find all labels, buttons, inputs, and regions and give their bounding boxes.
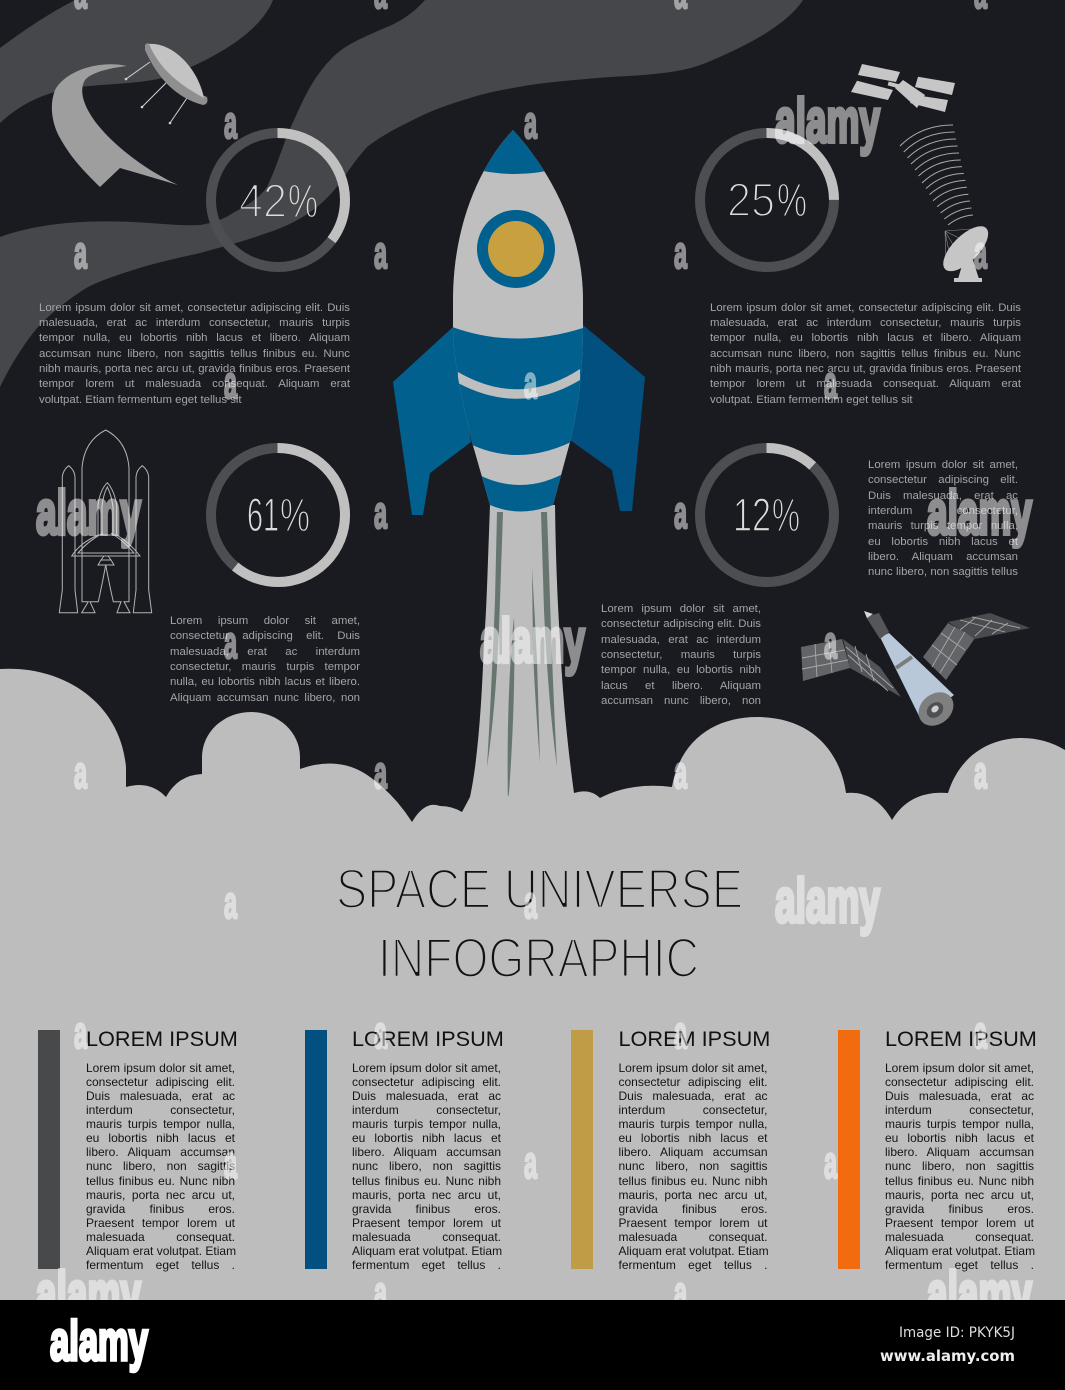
watermark: alamy marks: a — [674, 747, 688, 798]
text block: 12% description lower: tempor nulla, eu lobortis nibh — [601, 664, 761, 676]
title — [336, 857, 743, 989]
percent labels: 25 — [727, 173, 775, 226]
text block: 61% description: nulla, eu lobortis nibh lacus et libero. — [170, 676, 360, 688]
watermark: alamy marks: a — [974, 1007, 988, 1058]
text block: 25% description: tempor nulla, eu lobortis nibh lacus et libero. Aliquam — [710, 332, 1021, 344]
column 4 body: gravida finibus eros. — [885, 1202, 1034, 1216]
column 3 body: tellus finibus eu. Nunc nibh — [618, 1174, 768, 1188]
telescope tube — [880, 633, 954, 720]
column 4 body: Duis malesuada, erat ac — [885, 1089, 1034, 1103]
column 2 body: mauris, porta nec arcu ut, — [352, 1188, 501, 1202]
column 4 body: libero. Aliquam accumsan — [885, 1145, 1034, 1159]
column 4 body: Aliquam erat volutpat. Etiam — [885, 1244, 1035, 1258]
icon: space shuttle outline — [59, 430, 152, 613]
column 2 body: Lorem ipsum dolor sit amet, — [352, 1061, 501, 1075]
text block: 12% description lower: consectetur adipiscing elit. Duis — [601, 618, 761, 630]
column 3 body — [618, 1061, 769, 1272]
column 4 body: Lorem ipsum dolor sit amet, — [885, 1061, 1034, 1075]
text block: 61% description: Lorem ipsum dolor sit amet, — [170, 615, 360, 627]
colour bar: blue — [305, 1030, 327, 1269]
column 3 body: mauris, porta nec arcu ut, — [618, 1188, 768, 1202]
column 2 body: nunc libero, non sagittis — [352, 1159, 501, 1173]
footer image id: Image ID: PKYK5J — [899, 1325, 1015, 1341]
text block: 12% description lower — [601, 603, 761, 707]
percent labels: 61 — [247, 488, 279, 541]
column 4 body: eu lobortis nibh lacus et — [885, 1131, 1034, 1145]
icon: signal waves — [900, 125, 973, 225]
column 1 body: malesuada consequat. — [86, 1230, 235, 1244]
percent labels: 12 — [733, 488, 771, 541]
chart: 12% donut — [700, 448, 834, 582]
column 4 — [885, 1026, 1037, 1272]
text block: 25% description: nibh mauris, porta nec arcu ut, gravida finibus eros. Praesent — [710, 363, 1021, 375]
text block: 12% description lower: Lorem ipsum dolor sit amet, — [601, 603, 761, 615]
text block: 42% description: malesuada, erat ac interdum consectetur, mauris turpis — [39, 317, 350, 329]
column 1 body: eu lobortis nibh lacus et — [86, 1131, 235, 1145]
watermark: alamy marks: a — [524, 357, 538, 408]
column 3 body: fermentum eget tellus . — [618, 1258, 768, 1272]
percent labels: 42 — [239, 174, 287, 227]
watermark: alamy marks: a — [824, 617, 838, 668]
text block: 12% description right: nunc libero, non sagittis tellus — [868, 566, 1018, 578]
percent labels: % — [772, 488, 800, 541]
column 1 body: interdum consectetur, — [86, 1103, 235, 1117]
column 4 body: interdum consectetur, — [885, 1103, 1034, 1117]
column 2 body: interdum consectetur, — [352, 1103, 501, 1117]
icon: satellite dish — [936, 219, 995, 282]
watermark: alamy marks: a — [224, 877, 238, 928]
icon: communication satellite — [851, 64, 955, 112]
text block: 25% description: Lorem ipsum dolor sit amet, consectetur adipiscing elit. Duis — [710, 302, 1021, 314]
column 3 body: Lorem ipsum dolor sit amet, — [618, 1061, 768, 1075]
column 1 body: Aliquam erat volutpat. Etiam — [86, 1244, 236, 1258]
column 4 body: fermentum eget tellus . — [885, 1258, 1034, 1272]
left solar wing — [801, 639, 901, 697]
column 1 body: Praesent tempor lorem ut — [86, 1216, 235, 1230]
percent labels: % — [280, 488, 310, 541]
column 1 body: consectetur adipiscing elit. — [86, 1075, 235, 1089]
title: INFOGRAPHIC — [378, 926, 699, 989]
column 2 body: tellus finibus eu. Nunc nibh — [352, 1174, 501, 1188]
column 1 — [86, 1026, 238, 1272]
column 1 heading: LOREM IPSUM — [86, 1026, 238, 1051]
text block: 42% description: Lorem ipsum dolor sit amet, consectetur adipiscing elit. Duis — [39, 302, 350, 314]
text block: 12% description right: Duis malesuada, erat ac — [868, 490, 1018, 502]
column 1 body: mauris, porta nec arcu ut, — [86, 1188, 235, 1202]
column 1 body: fermentum eget tellus . — [86, 1258, 235, 1272]
column 1 body: Duis malesuada, erat ac — [86, 1089, 235, 1103]
watermark: alamy marks: a — [374, 1007, 388, 1058]
column 4 heading: LOREM IPSUM — [885, 1026, 1037, 1051]
column 2 body: consectetur adipiscing elit. — [352, 1075, 501, 1089]
rocket porthole — [477, 210, 555, 288]
watermark: alamy marks: alamy — [36, 479, 141, 548]
text block: 25% description: tempor lorem ut malesuada consequat. Aliquam erat — [710, 378, 1021, 390]
column 1 body — [86, 1061, 236, 1272]
column 4 body: mauris, porta nec arcu ut, — [885, 1188, 1034, 1202]
column 2 body: fermentum eget tellus . — [352, 1258, 501, 1272]
rocket left fin — [393, 327, 471, 515]
footer bar — [0, 1300, 1065, 1390]
text block: 61% description: malesuada, erat ac interdum — [170, 646, 360, 658]
watermark: alamy marks: a — [524, 1137, 538, 1188]
column 1 body: gravida finibus eros. — [86, 1202, 235, 1216]
percent labels: % — [777, 173, 807, 226]
column 3 body: Duis malesuada, erat ac — [618, 1089, 768, 1103]
text block: 61% description: Aliquam accumsan nunc libero, non — [170, 692, 360, 704]
text block: 42% description: accumsan nunc libero, non sagittis tellus finibus eu. Nunc — [39, 348, 350, 360]
watermark: alamy marks: a — [374, 487, 388, 538]
text block: 12% description right — [868, 459, 1018, 578]
column 3 body: mauris turpis tempor nulla, — [618, 1117, 768, 1131]
column 4 body: mauris turpis tempor nulla, — [885, 1117, 1034, 1131]
column 1 body: tellus finibus eu. Nunc nibh — [86, 1174, 235, 1188]
column 2 body: libero. Aliquam accumsan — [352, 1145, 501, 1159]
watermark: alamy marks: a — [374, 747, 388, 798]
chart: 61% donut — [211, 448, 345, 582]
percent labels — [239, 173, 807, 541]
column 2 heading: LOREM IPSUM — [352, 1026, 504, 1051]
column 4 body: tellus finibus eu. Nunc nibh — [885, 1174, 1034, 1188]
column 4 body: consectetur adipiscing elit. — [885, 1075, 1034, 1089]
text block: 12% description right: Lorem ipsum dolor sit amet, — [868, 459, 1018, 471]
icon: space telescope satellite — [801, 611, 1030, 733]
watermark: alamy marks: a — [224, 97, 238, 148]
watermark: alamy marks: a — [824, 1137, 838, 1188]
rocket exhaust — [466, 505, 580, 815]
text block: 25% description — [710, 302, 1021, 406]
text block: 61% description: consectetur adipiscing elit. Duis — [170, 630, 360, 642]
column 1 body: nunc libero, non sagittis — [86, 1159, 235, 1173]
column 2 body: gravida finibus eros. — [352, 1202, 501, 1216]
text block: 12% description right: interdum consectetur, — [868, 505, 1018, 517]
text block: 42% description: nibh mauris, porta nec arcu ut, gravida finibus eros. Praesent — [39, 363, 350, 375]
column 1 body: mauris turpis tempor nulla, — [86, 1117, 235, 1131]
text block: 61% description — [170, 615, 360, 704]
column 3 — [618, 1026, 770, 1272]
text block: 12% description right: mauris turpis tempor nulla, — [868, 520, 1018, 532]
column 3 heading: LOREM IPSUM — [618, 1026, 770, 1051]
text block: 42% description — [39, 302, 350, 406]
text block: 42% description: tempor lorem ut malesuada consequat. Aliquam erat — [39, 378, 350, 390]
column 2 body: mauris turpis tempor nulla, — [352, 1117, 501, 1131]
text block: 42% description: volutpat. Etiam fermentum eget tellus sit — [39, 394, 242, 406]
watermark: alamy marks: a — [674, 487, 688, 538]
watermark: alamy marks: a — [374, 227, 388, 278]
watermark: alamy marks: a — [74, 1007, 88, 1058]
text block: 12% description right: libero. Aliquam accumsan — [868, 551, 1018, 563]
watermark: alamy marks: a — [524, 97, 538, 148]
column 4 body: Praesent tempor lorem ut — [885, 1216, 1034, 1230]
column 2 body — [352, 1061, 502, 1272]
watermark: alamy marks: a — [524, 877, 538, 928]
colour bar: gold — [571, 1030, 593, 1269]
column 3 body: nunc libero, non sagittis — [618, 1159, 768, 1173]
text block: 25% description: malesuada, erat ac interdum consectetur, mauris turpis — [710, 317, 1021, 329]
column 3 body: Aliquam erat volutpat. Etiam — [618, 1244, 769, 1258]
text block: 12% description right: eu lobortis nibh lacus et — [868, 536, 1018, 548]
watermark: alamy marks: alamy — [775, 87, 880, 156]
smoke band: long diagonal — [0, 0, 803, 387]
column 1 body: Lorem ipsum dolor sit amet, — [86, 1061, 235, 1075]
watermark: alamy marks: a — [674, 1267, 688, 1318]
column 3 body: libero. Aliquam accumsan — [618, 1145, 768, 1159]
watermark: alamy marks: alamy — [775, 867, 880, 936]
icon: flying saucer probe — [125, 43, 208, 124]
footer logo: alamy — [50, 1309, 148, 1372]
right solar wing — [923, 613, 1030, 680]
column 3 body: Praesent tempor lorem ut — [618, 1216, 768, 1230]
watermark: alamy marks: a — [974, 227, 988, 278]
text block: 25% description: accumsan nunc libero, non sagittis tellus finibus eu. Nunc — [710, 348, 1021, 360]
smoke band: upper left — [0, 0, 273, 123]
chart: 42% donut — [211, 133, 345, 267]
icon: comet swoosh — [52, 64, 178, 187]
footer url: www.alamy.com — [880, 1347, 1015, 1365]
column 1 body: libero. Aliquam accumsan — [86, 1145, 235, 1159]
column 4 body — [885, 1061, 1035, 1272]
watermark: alamy marks: a — [374, 1267, 388, 1318]
text block: 12% description right: consectetur adipiscing elit. — [868, 474, 1018, 486]
watermark: alamy marks: alamy — [36, 1260, 141, 1329]
column 3 body: consectetur adipiscing elit. — [618, 1075, 768, 1089]
column 2 body: malesuada consequat. — [352, 1230, 501, 1244]
text block: 12% description lower: consectetur, mauris turpis — [601, 649, 761, 661]
title: SPACE UNIVERSE — [336, 857, 743, 920]
watermark: alamy marks: a — [74, 227, 88, 278]
watermark: alamy marks: a — [824, 357, 838, 408]
column 3 body: interdum consectetur, — [618, 1103, 768, 1117]
percent labels: % — [288, 174, 318, 227]
text block: 61% description: consectetur, mauris turpis tempor — [170, 661, 360, 673]
text block: 42% description: tempor nulla, eu lobortis nibh lacus et libero. Aliquam — [39, 332, 350, 344]
text block: 12% description lower: lacus et libero. Aliquam — [601, 680, 761, 692]
text block: 25% description: volutpat. Etiam fermentum eget tellus sit — [710, 394, 913, 406]
watermark: alamy marks: a — [974, 747, 988, 798]
column 2 body: Duis malesuada, erat ac — [352, 1089, 501, 1103]
watermark: alamy marks: a — [224, 617, 238, 668]
colour bar: grey — [38, 1030, 60, 1269]
watermark: alamy marks: a — [674, 227, 688, 278]
column 3 body: eu lobortis nibh lacus et — [618, 1131, 768, 1145]
chart: 25% donut — [700, 133, 834, 267]
column 4 body: nunc libero, non sagittis — [885, 1159, 1034, 1173]
rocket right fin — [570, 325, 645, 511]
column 2 body: Praesent tempor lorem ut — [352, 1216, 501, 1230]
text block: 12% description lower: malesuada, erat ac interdum — [601, 634, 761, 646]
rocket body — [453, 130, 583, 512]
column 3 body: malesuada consequat. — [618, 1230, 768, 1244]
column 4 body: malesuada consequat. — [885, 1230, 1034, 1244]
colour bar: orange — [838, 1030, 860, 1269]
rocket — [393, 120, 645, 520]
column 3 body: gravida finibus eros. — [618, 1202, 768, 1216]
text block: 12% description lower: accumsan nunc libero, non — [601, 695, 761, 707]
watermark: alamy marks: a — [74, 747, 88, 798]
watermark: alamy marks: a — [224, 1137, 238, 1188]
column 2 body: Aliquam erat volutpat. Etiam — [352, 1244, 502, 1258]
watermark: alamy marks: a — [674, 1007, 688, 1058]
watermark: alamy marks: a — [224, 357, 238, 408]
cloud and lower grey panel — [0, 669, 1065, 1300]
watermark: alamy marks: alamy — [480, 607, 585, 676]
column 2 — [352, 1026, 504, 1272]
column 2 body: eu lobortis nibh lacus et — [352, 1131, 501, 1145]
